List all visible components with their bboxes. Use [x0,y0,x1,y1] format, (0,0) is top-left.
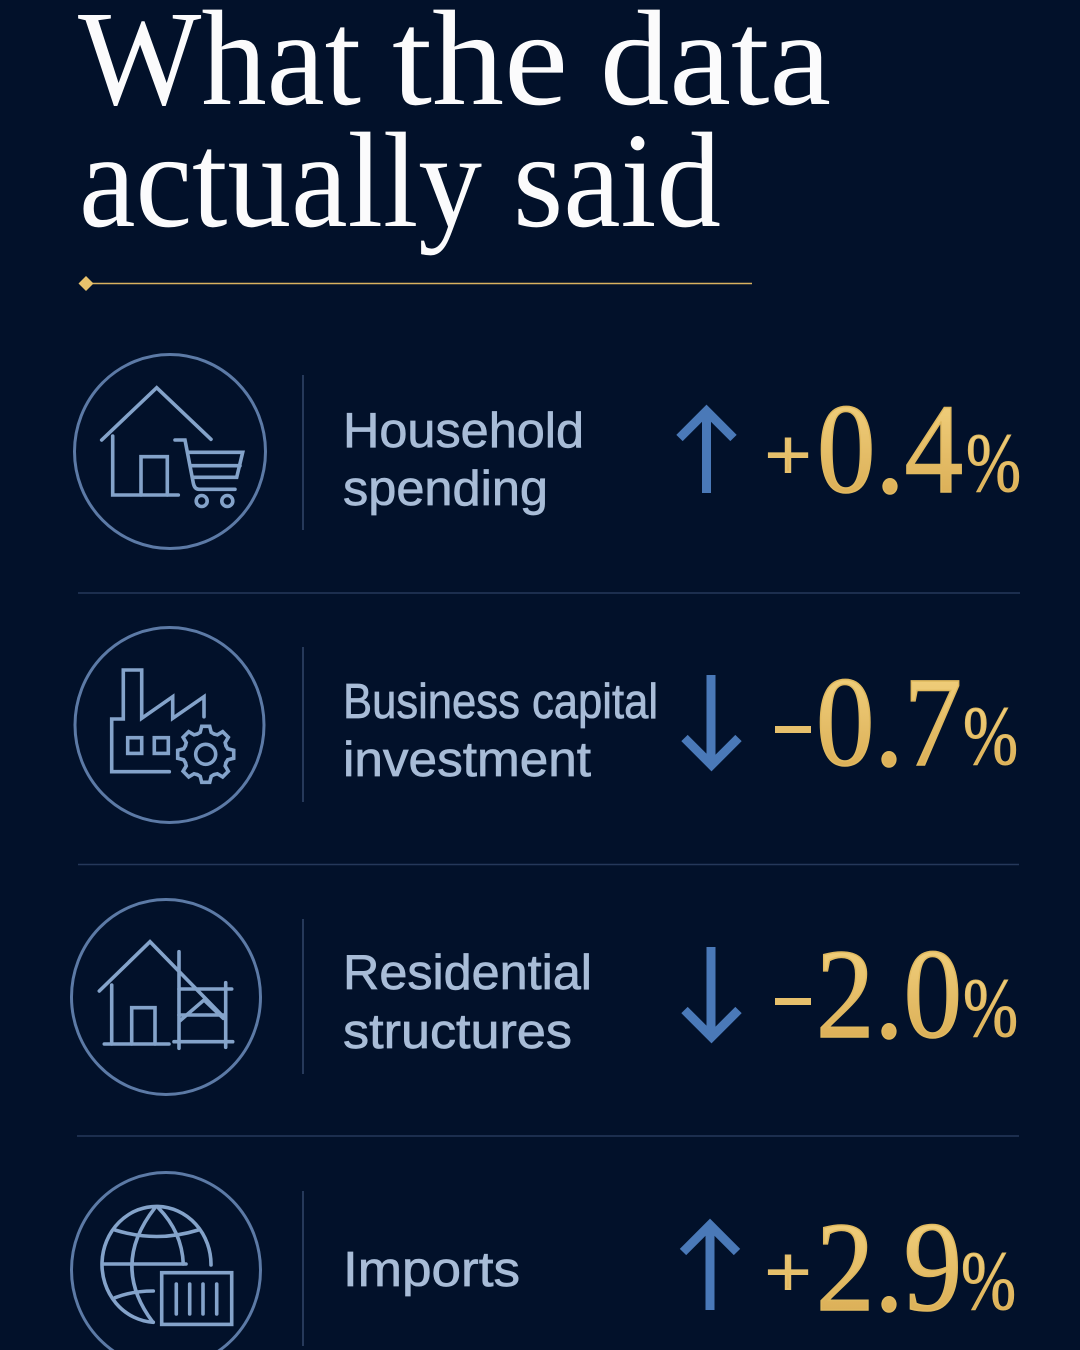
label: residential structures [343,946,592,1059]
value: -2.0%: 2.0 [816,923,962,1065]
value: -2.0%: % [963,962,1018,1055]
value: +2.9%: 2.9 [816,1196,962,1338]
value: -0.7%: 0.7 [816,651,962,793]
label: business capital investment: investment [343,733,591,787]
label: business capital investment: Business capital [343,675,658,729]
icon: factory and gear [75,628,264,822]
value: -0.7% [775,651,1018,793]
arrow: up [683,1225,737,1310]
label: business capital investment [343,675,658,787]
arrow: down [684,675,738,765]
icon: house with scaffolding [72,900,260,1094]
label: household spending: Household [343,404,584,458]
value: +0.4%: + [765,415,811,495]
value: +2.9%: + [765,1232,811,1312]
label: household spending: spending [343,462,548,516]
row: imports [72,1172,1016,1350]
arrow: up [680,411,734,493]
title: said [513,106,721,256]
value: +0.4%: 0.4 [817,378,963,520]
icon: globe and shipping container [72,1172,260,1350]
label: residential structures: structures [343,1005,572,1059]
label: residential structures: Residential [343,946,592,1000]
row: residential structures [72,900,1018,1094]
title: actually [79,106,482,256]
arrow: down [684,947,738,1037]
row: business capital investment [75,628,1018,822]
icon: house and shopping cart [74,354,266,548]
value: +2.9% [765,1196,1016,1338]
title [78,0,831,256]
label: household spending [343,404,584,516]
value: +0.4% [765,378,1021,520]
value: -0.7%: % [963,690,1018,783]
icon part: gear teeth [178,726,234,782]
value: -2.0% [775,923,1018,1065]
row: household spending [74,354,1021,548]
gold divider with diamond [78,276,752,291]
label: imports: Imports [343,1243,520,1297]
value: +2.9%: % [961,1235,1016,1328]
value: +0.4%: % [966,417,1021,510]
